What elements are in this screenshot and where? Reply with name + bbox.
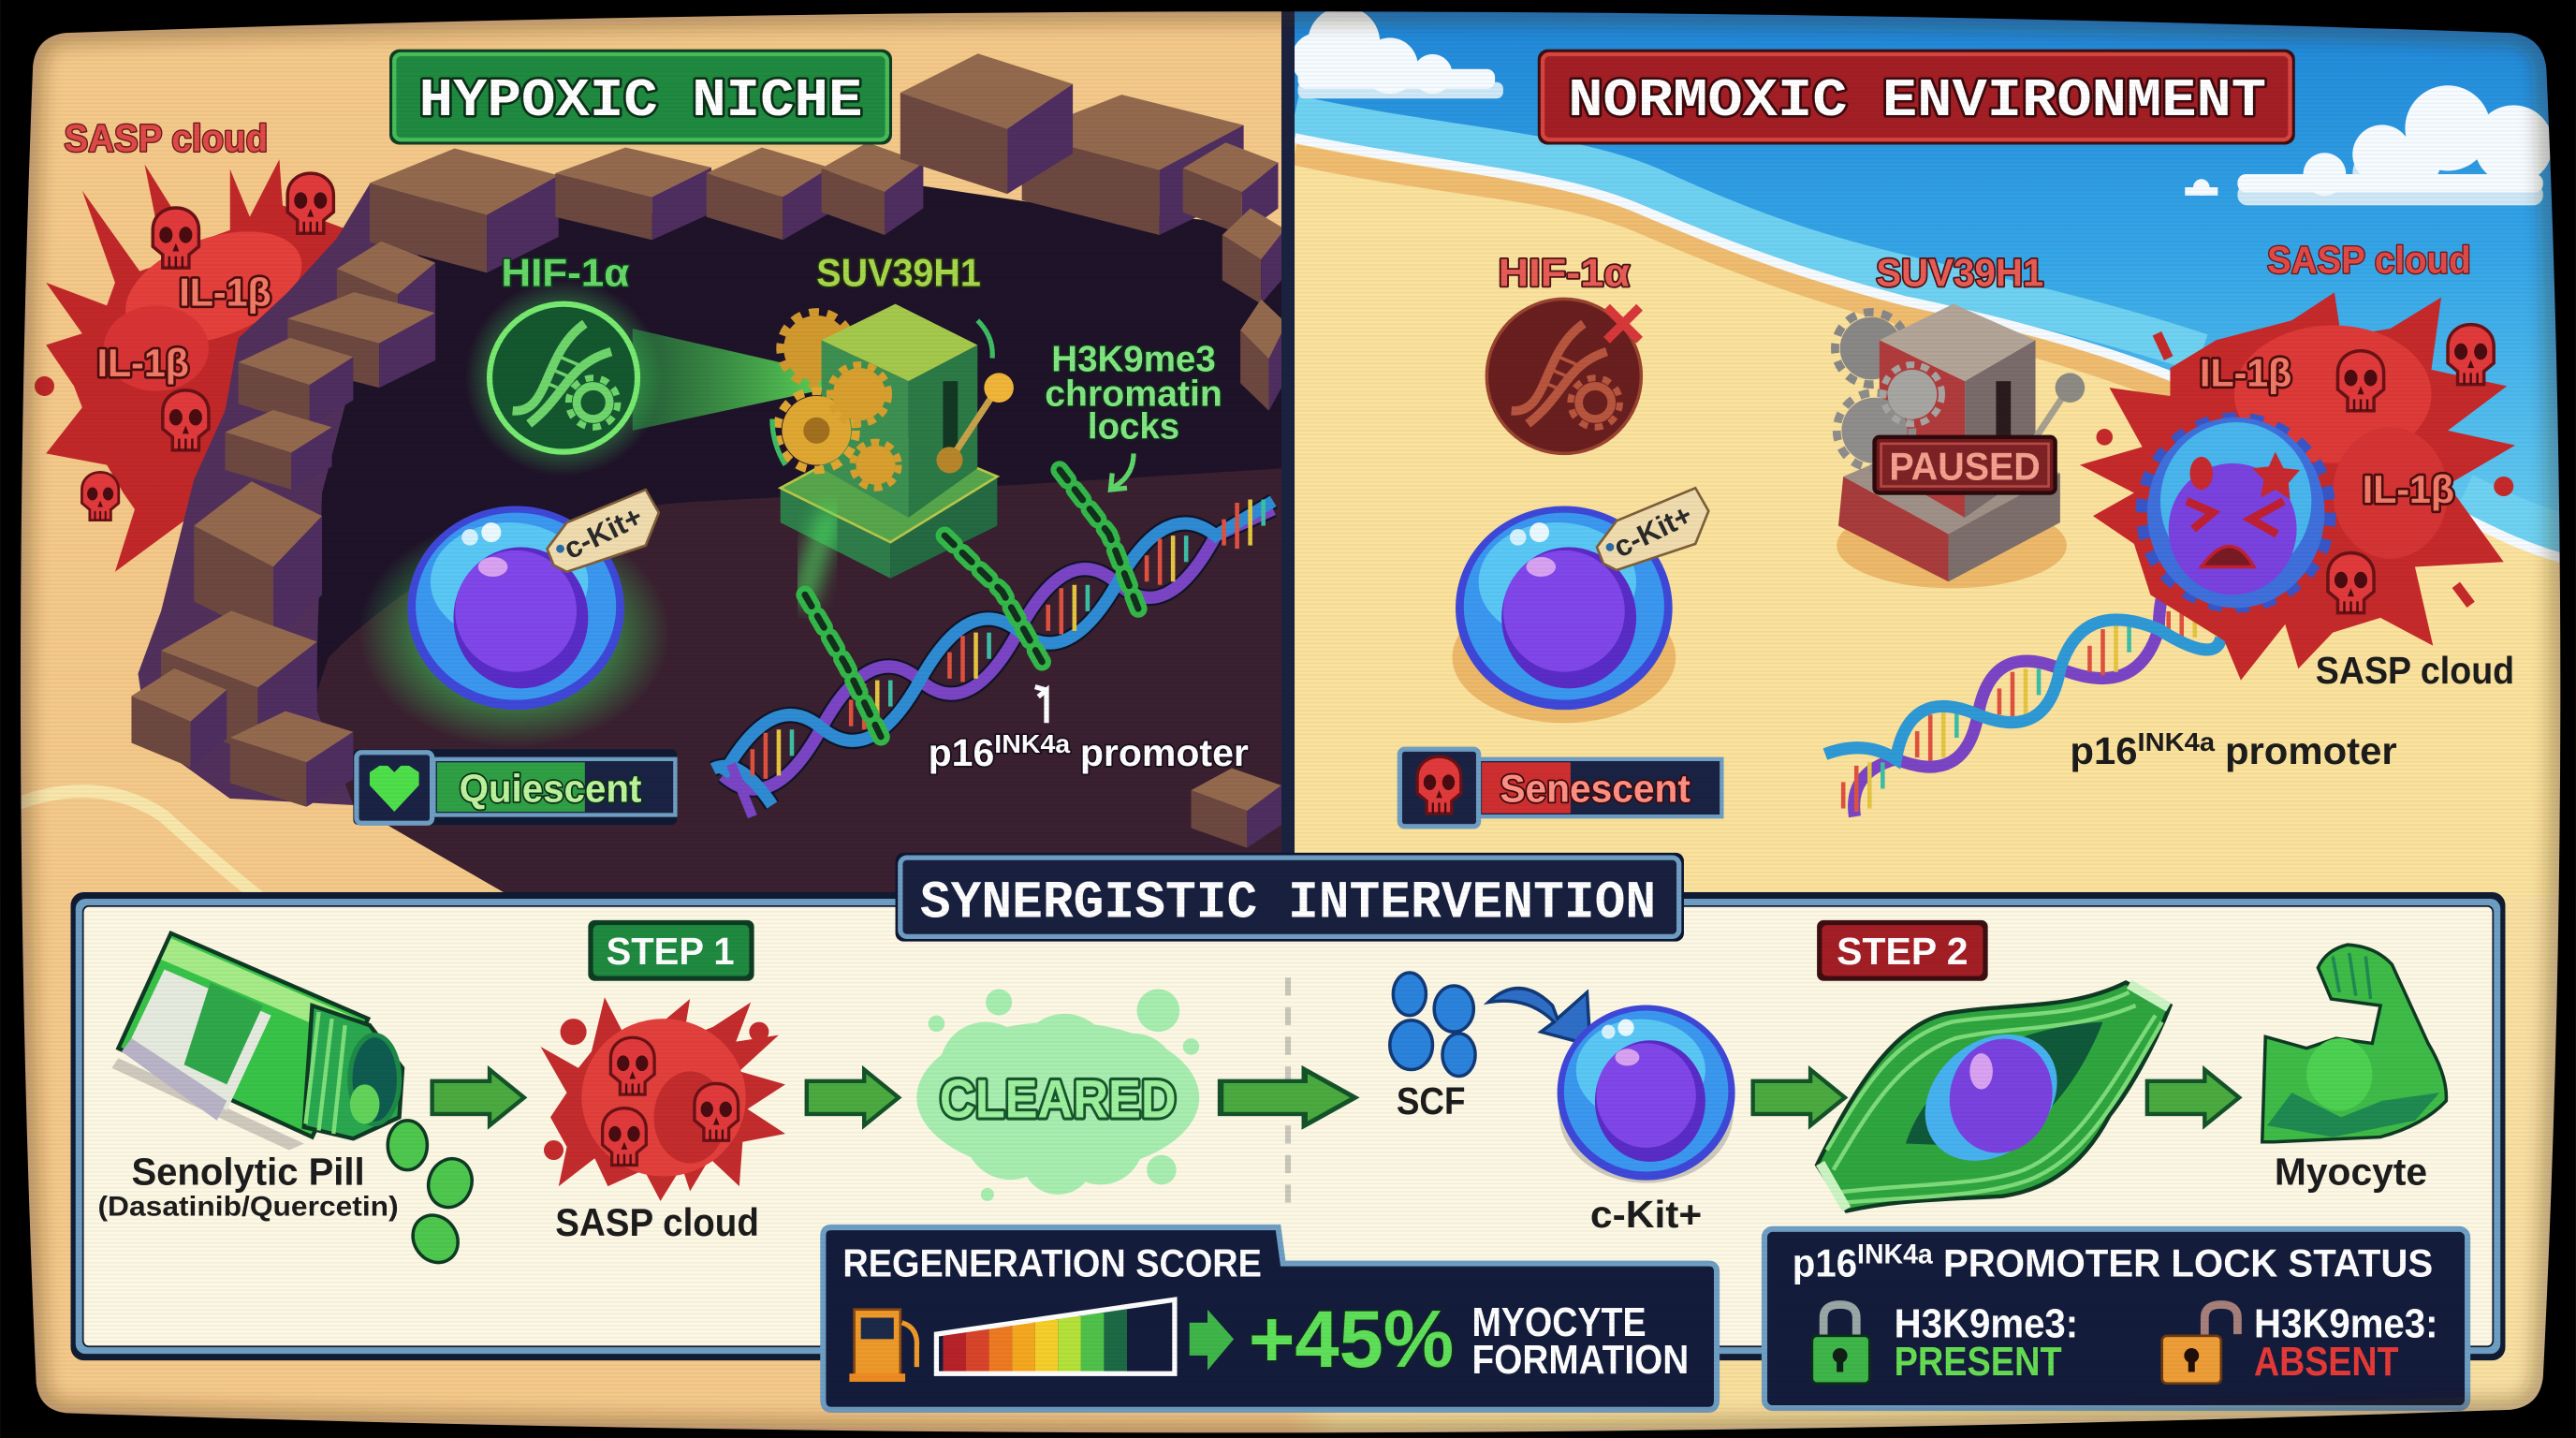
badge: step 1 bbox=[588, 920, 754, 981]
icon: muscle fibre with cell bbox=[1817, 983, 2170, 1211]
label: p16INK4a promoter left: p16 bbox=[929, 731, 993, 774]
arrow to chromatin locks bbox=[1110, 453, 1134, 490]
icon: HIF-1α inactive bbox=[1486, 299, 1641, 453]
icon: closed green lock bbox=[1812, 1304, 1869, 1384]
badge: step 1: STEP 1 bbox=[607, 930, 735, 973]
cave rocks bbox=[131, 53, 1286, 848]
arrow 4 bbox=[1753, 1070, 1845, 1125]
SASP cloud: left bbox=[35, 116, 353, 572]
label: SCF: SCF bbox=[1397, 1079, 1466, 1123]
cell: c-Kit+ right: c-Kit+ bbox=[1608, 497, 1697, 564]
sand path bbox=[13, 791, 263, 901]
label: HIF-1α active: HIF-1α bbox=[501, 250, 629, 294]
label: H3K9me3 absent bbox=[2254, 1301, 2438, 1385]
label: p16INK4a promoter left: promoter bbox=[1080, 731, 1249, 774]
panel title: normoxic environment: NORMOXIC ENVIRONMENT bbox=[1568, 71, 2266, 132]
label: myocyte formation bbox=[1472, 1299, 1689, 1383]
icon: open orange lock bbox=[2162, 1304, 2237, 1384]
icon: cleared cloud bbox=[916, 990, 1199, 1201]
panel title: normoxic environment bbox=[1538, 50, 2295, 144]
value: +45%: +45% bbox=[1249, 1295, 1454, 1385]
badge: PAUSED: PAUSED bbox=[1889, 444, 2041, 488]
label: H3K9me3 chromatin locks: H3K9me3 bbox=[1051, 340, 1216, 380]
title: lock status: p16 bbox=[1793, 1241, 1860, 1285]
label: H3K9me3 chromatin locks: chromatin bbox=[1045, 374, 1222, 414]
panel title: hypoxic niche bbox=[389, 50, 892, 144]
label: p16INK4a promoter right: promoter bbox=[2225, 729, 2397, 772]
cell: quiescent c-Kit+ bbox=[359, 490, 670, 748]
DNA: left p16 promoter bbox=[713, 500, 1273, 816]
arrow 2 bbox=[807, 1070, 899, 1125]
title: lock status: INK4a bbox=[1857, 1240, 1933, 1270]
label: SASP cloud top right: SASP cloud bbox=[2267, 238, 2471, 281]
label: myocyte formation: MYOCYTE bbox=[1472, 1299, 1647, 1345]
pills bbox=[388, 1121, 478, 1271]
label: H3K9me3 absent: H3K9me3: bbox=[2254, 1301, 2438, 1347]
label: p16INK4a promoter right: p16 bbox=[2070, 729, 2135, 772]
cell: quiescent c-Kit+: c-Kit+ bbox=[558, 499, 648, 565]
label: SASP cloud black: SASP cloud bbox=[2316, 649, 2514, 692]
divider bbox=[1281, 0, 1295, 871]
gauge bbox=[936, 1299, 1175, 1373]
panel: synergistic intervention bbox=[71, 853, 2505, 1360]
beam from HIF-1α to SUV39H1 bbox=[633, 329, 862, 431]
icon: senolytic pill bottle bbox=[111, 933, 402, 1151]
icon: cleared cloud: CLEARED bbox=[940, 1069, 1177, 1129]
status bar: senescent bbox=[1399, 749, 1721, 827]
arrow 3 bbox=[1221, 1070, 1355, 1125]
SASP cloud: right with senescent cell: IL-1β bbox=[2363, 467, 2454, 511]
background: right beach panel bbox=[1284, 0, 2576, 920]
label: HIF-1α inactive: HIF-1α bbox=[1499, 250, 1630, 294]
label: H3K9me3 present: H3K9me3: bbox=[1895, 1301, 2078, 1347]
badge: step 2 bbox=[1817, 920, 1988, 981]
icon: myocyte arm bbox=[2262, 945, 2446, 1142]
label: H3K9me3 chromatin locks bbox=[1045, 340, 1222, 448]
label: SUV39H1 paused: SUV39H1 bbox=[1876, 250, 2043, 294]
label: H3K9me3 present: PRESENT bbox=[1895, 1339, 2062, 1385]
label: p16INK4a promoter left: INK4a bbox=[994, 729, 1071, 758]
label: SUV39H1 active: SUV39H1 bbox=[816, 250, 981, 294]
label: SASP cloud step 1: SASP cloud bbox=[555, 1200, 759, 1244]
arrow: SCF binding bbox=[1488, 989, 1590, 1045]
machine: SUV39H1 paused bbox=[1835, 304, 2085, 588]
status bar: quiescent bbox=[353, 749, 677, 825]
label: senolytic pill: Senolytic Pill bbox=[131, 1150, 365, 1193]
cell: c-Kit+ step 2 bbox=[1558, 1005, 1735, 1183]
label: SASP cloud: SASP cloud bbox=[65, 116, 268, 159]
cell: c-Kit+ right bbox=[1453, 488, 1708, 723]
label: Myocyte: Myocyte bbox=[2275, 1150, 2427, 1193]
icon: SCF molecules bbox=[1390, 973, 1475, 1077]
background: bottom sand bbox=[0, 895, 2576, 1438]
icon: fuel pump bbox=[849, 1310, 917, 1382]
SASP cloud: right with senescent cell: IL-1β bbox=[2200, 350, 2291, 394]
damaged senescent cell bbox=[2144, 418, 2328, 608]
label: c-Kit+: c-Kit+ bbox=[1590, 1193, 1702, 1236]
title: lock status: PROMOTER LOCK STATUS bbox=[1933, 1241, 2433, 1285]
panel title: hypoxic niche: HYPOXIC NICHE bbox=[419, 71, 862, 132]
title: regeneration score: REGENERATION SCORE bbox=[842, 1241, 1262, 1285]
background: left sand panel bbox=[0, 0, 1284, 920]
machine: SUV39H1 active bbox=[772, 304, 1014, 579]
SASP cloud: right with senescent cell bbox=[2080, 238, 2515, 681]
arrow to score bbox=[1190, 1310, 1234, 1371]
label: H3K9me3 chromatin locks: locks bbox=[1088, 407, 1179, 448]
icon: SASP cloud step 1 bbox=[540, 997, 785, 1201]
status bar: senescent: Senescent bbox=[1500, 766, 1690, 810]
badge: step 2: STEP 2 bbox=[1837, 930, 1969, 973]
cave interior bbox=[313, 181, 1284, 895]
panel: regeneration score bbox=[823, 1227, 1717, 1410]
label: p16INK4a promoter right: INK4a bbox=[2138, 727, 2215, 756]
SASP cloud: left: IL-1β bbox=[179, 270, 271, 314]
title: synergistic intervention bbox=[896, 853, 1684, 942]
SASP cloud: left: IL-1β bbox=[97, 341, 189, 385]
label: myocyte formation: FORMATION bbox=[1472, 1337, 1689, 1383]
status bar: quiescent: Quiescent bbox=[460, 766, 641, 810]
label: H3K9me3 present bbox=[1895, 1301, 2078, 1385]
arrow 1 bbox=[432, 1070, 524, 1125]
dashed step divider bbox=[1286, 977, 1290, 1208]
arrow to p16 promoter bbox=[1035, 687, 1046, 723]
icon: HIF-1α DNA gear bbox=[465, 279, 662, 477]
label: H3K9me3 absent: ABSENT bbox=[2254, 1339, 2399, 1385]
chromatin lock chains bbox=[805, 470, 1142, 742]
DNA: right p16 promoter bbox=[1825, 583, 2221, 816]
title: synergistic intervention: SYNERGISTIC INTERVENTION bbox=[920, 873, 1656, 932]
label: senolytic pill bbox=[97, 1150, 399, 1223]
label: senolytic pill: (Dasatinib/Quercetin) bbox=[97, 1192, 399, 1223]
panel: p16 promoter lock status bbox=[1764, 1229, 2467, 1408]
arrow 5 bbox=[2147, 1070, 2239, 1125]
